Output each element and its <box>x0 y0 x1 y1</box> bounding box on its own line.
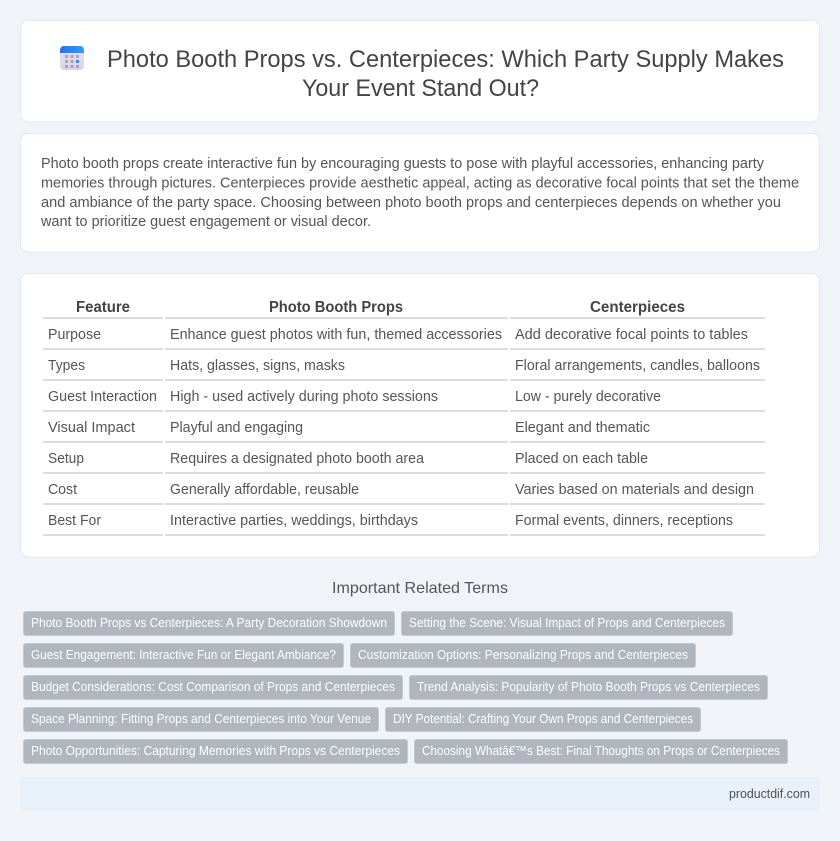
table header row: Photo Booth Props <box>269 299 403 316</box>
table row: Purpose <box>43 327 765 350</box>
tag: Space Planning: Fitting Props and Centerpieces into Your Venue <box>31 712 371 726</box>
table row: Best For <box>43 513 765 536</box>
tag: Setting the Scene: Visual Impact of Props and Centerpieces <box>409 616 725 630</box>
table row: Cost <box>43 482 765 505</box>
heading: Important Related Terms: Important Related Terms <box>332 580 508 597</box>
tag: Photo Booth Props vs Centerpieces: A Party Decoration Showdown <box>31 616 387 630</box>
footer <box>20 777 820 811</box>
tag <box>410 676 768 700</box>
table row: Setup: Placed on each table <box>515 451 648 467</box>
table row: Setup: Requires a designated photo booth area <box>170 451 425 467</box>
table row: Best For: Best For <box>48 513 101 529</box>
tag: Choosing Whatâ€™s Best: Final Thoughts on Props or Centerpieces <box>422 744 780 758</box>
panel: introduction text: want to prioritize guest engagement or visual decor. <box>40 214 371 230</box>
tag <box>24 644 344 668</box>
tag: Customization Options: Personalizing Props and Centerpieces <box>358 648 688 662</box>
table row: Guest Interaction: High - used actively during photo sessions <box>170 389 438 405</box>
tag: Photo Opportunities: Capturing Memories with Props vs Centerpieces <box>31 744 400 758</box>
table row: Purpose: Add decorative focal points to tables <box>515 327 748 343</box>
tag: Trend Analysis: Popularity of Photo Booth Props vs Centerpieces <box>417 680 760 694</box>
panel: introduction text: Photo booth props create interactive fun by encouraging guests to pose with playful accessories, enhancing party <box>41 156 765 172</box>
table row: Cost: Varies based on materials and design <box>515 482 754 498</box>
table row: Visual Impact: Visual Impact <box>48 420 135 436</box>
title <box>107 46 784 102</box>
tag: Budget Considerations: Cost Comparison of Props and Centerpieces <box>31 680 395 694</box>
tag: Guest Engagement: Interactive Fun or Elegant Ambiance? <box>31 648 336 662</box>
panel: header <box>20 20 820 122</box>
table row: Guest Interaction: Guest Interaction <box>48 389 157 405</box>
tag <box>24 612 394 636</box>
table header row: Feature <box>76 299 130 316</box>
table row: Visual Impact <box>43 420 765 443</box>
tag <box>414 740 788 764</box>
table row: Best For: Interactive parties, weddings, birthdays <box>170 513 418 529</box>
table row: Types <box>43 358 765 381</box>
table row: Cost: Generally affordable, reusable <box>170 482 359 498</box>
tag <box>386 708 700 732</box>
table row: Visual Impact: Elegant and thematic <box>515 420 650 436</box>
table row: Best For: Formal events, dinners, receptions <box>515 513 733 529</box>
table row: Guest Interaction <box>43 389 765 412</box>
tag <box>24 740 408 764</box>
table header row <box>43 299 765 319</box>
related terms tags <box>24 612 788 764</box>
panel: comparison table <box>20 274 820 557</box>
table row: Purpose: Enhance guest photos with fun, themed accessories <box>170 327 502 343</box>
tag: DIY Potential: Crafting Your Own Props and Centerpieces <box>393 712 693 726</box>
panel: introduction text: and ambiance of the party space. Choosing between photo booth props and centerpieces depends on whether you <box>41 195 781 211</box>
panel: introduction text <box>20 134 820 252</box>
table header row: Centerpieces <box>590 299 685 316</box>
table row: Visual Impact: Playful and engaging <box>170 420 303 436</box>
panel: introduction text: memories through pictures. Centerpieces provide aesthetic appeal, acting as decorative focal points that set the theme <box>41 176 799 192</box>
table row: Purpose: Purpose <box>48 327 101 343</box>
footer: productdif.com <box>729 786 810 801</box>
table row: Setup <box>43 451 765 474</box>
tag <box>24 708 378 732</box>
table row: Cost: Cost <box>48 482 77 498</box>
icon: calendar <box>60 46 84 70</box>
title: Photo Booth Props vs. Centerpieces: Which Party Supply Makes <box>107 46 784 73</box>
tag <box>350 644 696 668</box>
table row: Types: Types <box>48 358 85 374</box>
table row: Types: Floral arrangements, candles, balloons <box>515 358 760 374</box>
table row: Types: Hats, glasses, signs, masks <box>170 358 345 374</box>
tag <box>24 676 402 700</box>
table row: Guest Interaction: Low - purely decorative <box>515 389 661 405</box>
table row: Setup: Setup <box>48 451 84 467</box>
title: Your Event Stand Out? <box>302 75 539 102</box>
tag <box>402 612 732 636</box>
